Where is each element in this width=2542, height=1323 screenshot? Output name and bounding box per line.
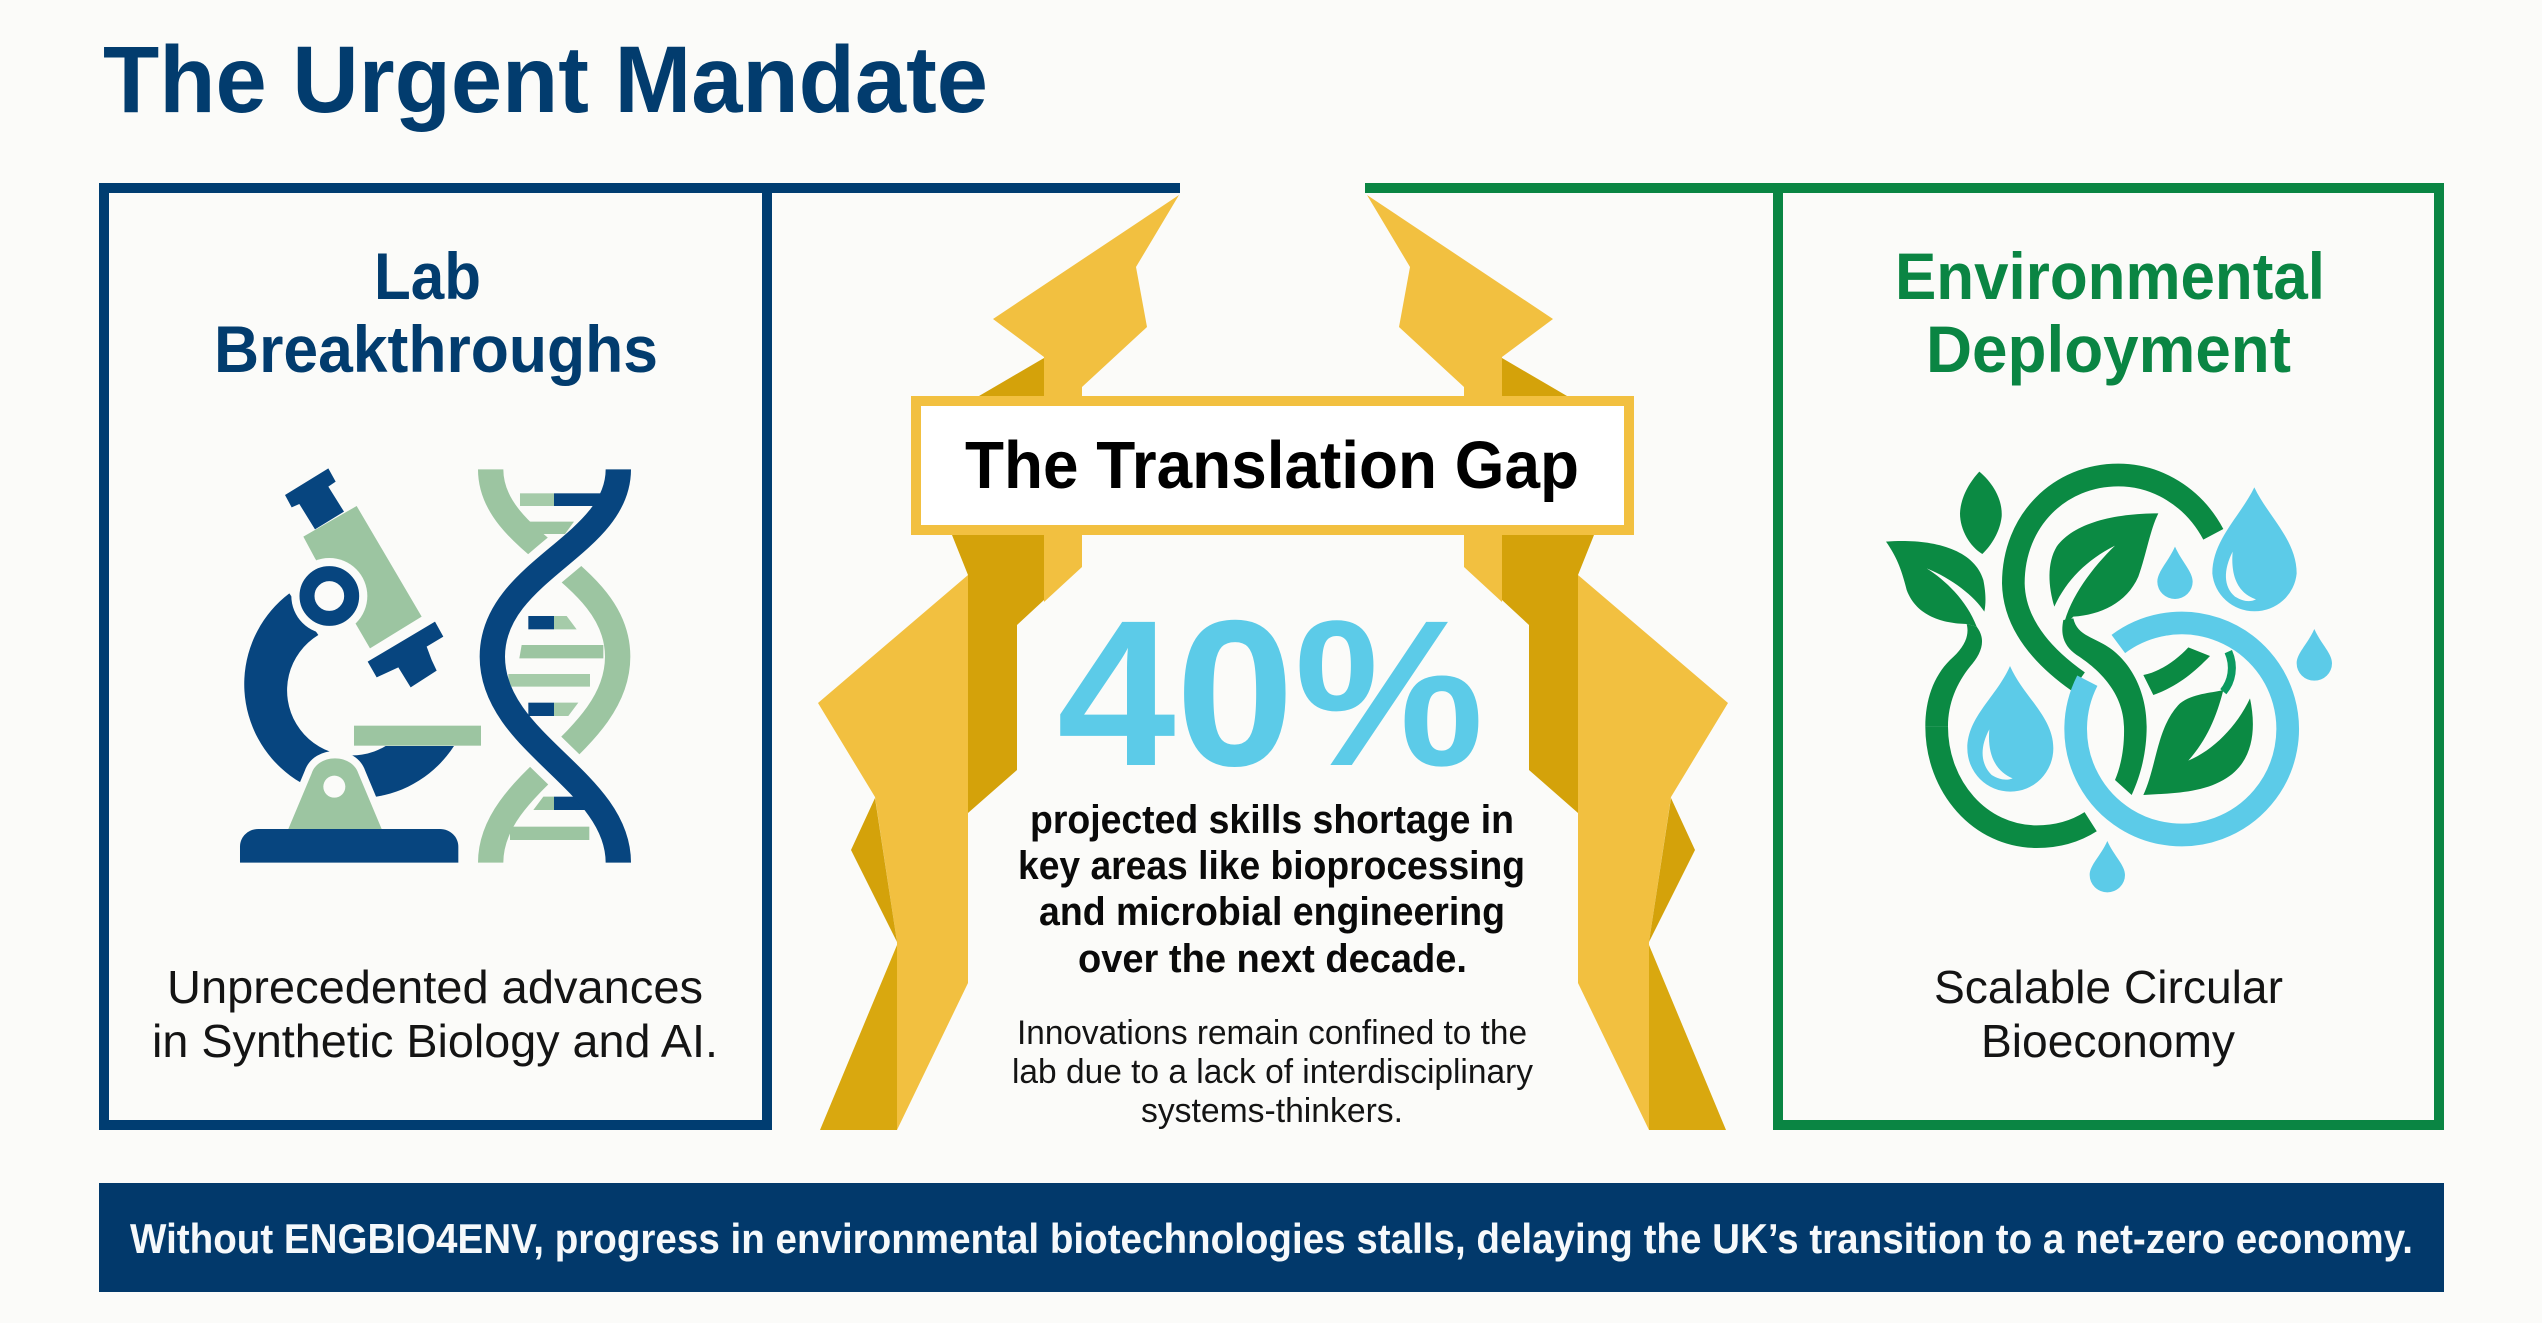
text: skills shortage description: over the next decade.	[1078, 937, 1467, 981]
banner text: The Translation Gap	[965, 428, 1579, 503]
heading: environmental deployment: Environmental	[1895, 239, 2325, 313]
panel: lab breakthroughs	[99, 183, 1180, 1125]
graphic: broken gold gap left side	[818, 195, 1179, 1130]
microscope	[240, 468, 481, 863]
DNA helix	[491, 469, 618, 863]
icon: microscope and DNA helix	[240, 468, 618, 863]
graphic: broken gold gap right side	[1367, 195, 1728, 1130]
stat: 40 percent: 40%	[1057, 578, 1484, 810]
text: translation gap note: systems-thinkers.	[1141, 1092, 1403, 1130]
text: translation gap note	[1012, 1014, 1533, 1130]
icon: leaves, water and circular loops	[1886, 472, 2332, 892]
text: environmental caption: Bioeconomy	[1981, 1015, 2236, 1067]
banner: the translation gap	[916, 401, 1629, 530]
text: translation gap note: lab due to a lack of interdisciplinary	[1012, 1053, 1533, 1091]
text: skills shortage description: and microbial engineering	[1039, 890, 1505, 934]
heading: environmental deployment	[1895, 239, 2325, 386]
text: lab caption: Unprecedented advances	[167, 961, 703, 1013]
blue ring and droplets	[1967, 487, 2332, 892]
text: translation gap note: Innovations remain confined to the	[1017, 1014, 1527, 1052]
footer text: Without ENGBIO4ENV, progress in environmental biotechnologies stalls, delaying the UK’s transition to a net-zero economy.	[130, 1215, 2413, 1262]
footer callout bar	[99, 1183, 2444, 1292]
heading: lab breakthroughs	[214, 239, 658, 386]
text: skills shortage description: key areas like bioprocessing	[1018, 844, 1525, 888]
heading: lab breakthroughs: Lab	[374, 239, 481, 313]
text: lab caption: in Synthetic Biology and AI.	[152, 1015, 718, 1067]
title: The Urgent Mandate	[103, 27, 988, 133]
text: environmental caption: Scalable Circular	[1934, 961, 2283, 1013]
text: skills shortage description: projected skills shortage in	[1030, 798, 1514, 842]
heading: environmental deployment: Deployment	[1926, 312, 2291, 386]
green stems and leaves	[1886, 472, 2253, 837]
text: environmental caption	[1934, 961, 2283, 1067]
text: skills shortage description	[1018, 798, 1525, 981]
text: lab caption	[152, 961, 718, 1067]
heading: lab breakthroughs: Breakthroughs	[214, 312, 658, 386]
panel: environmental deployment	[1365, 183, 2444, 1125]
